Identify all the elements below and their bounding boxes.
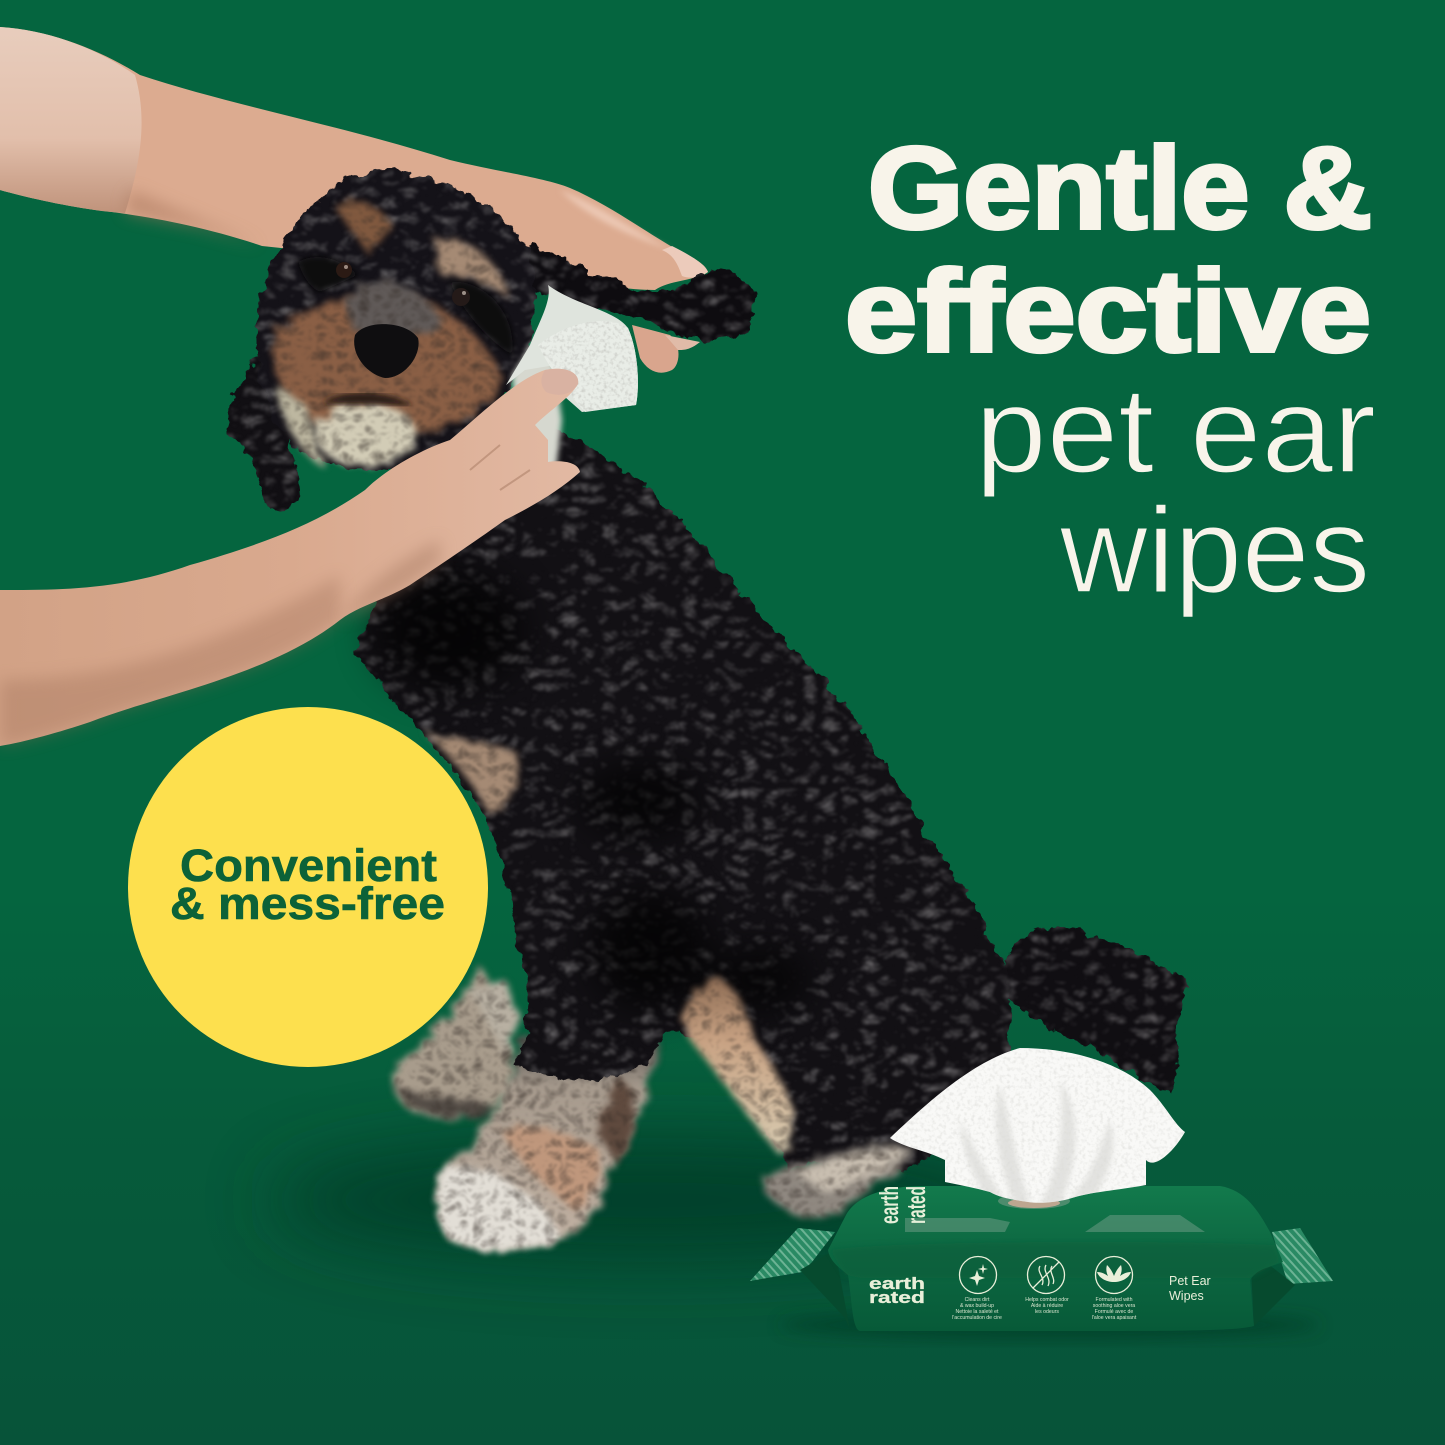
package benefit icons <box>960 1256 1132 1294</box>
wipe at ear <box>506 285 645 415</box>
headline: wipes <box>1059 482 1370 618</box>
dog hind paw <box>763 1144 911 1218</box>
headline: pet ear <box>975 362 1376 498</box>
package benefit captions: les odeurs <box>1035 1309 1059 1315</box>
package benefit captions: soothing aloe vera <box>1093 1303 1135 1309</box>
package right tab <box>1272 1228 1333 1284</box>
dog hind thigh tan patch <box>684 978 795 1156</box>
dog eyes <box>336 262 470 306</box>
pale fur beside hand <box>512 320 562 470</box>
package product name: Pet Ear <box>1169 1274 1211 1288</box>
dog right ear <box>528 245 756 340</box>
upper arm and hand <box>0 27 708 290</box>
package benefit captions: & wax build-up <box>960 1303 994 1309</box>
package body <box>828 1186 1283 1331</box>
package benefit captions: Cleans dirt <box>965 1297 990 1303</box>
package product name: Wipes <box>1169 1289 1204 1303</box>
lower arm and hand <box>0 369 580 746</box>
callout text: Convenient <box>180 840 437 891</box>
dog chin <box>315 402 415 466</box>
dog <box>227 169 1190 1250</box>
package benefit captions: Nettoie la saleté et <box>956 1309 999 1315</box>
wipes package: rated <box>901 1186 931 1224</box>
dog tail <box>1004 926 1190 1095</box>
dog mouth <box>325 394 410 405</box>
dog forehead markings <box>335 200 510 345</box>
package side folds <box>800 1250 850 1330</box>
package benefit captions: Helps combat odor <box>1025 1297 1069 1303</box>
headline: Gentle & <box>868 123 1372 253</box>
dog left ear <box>227 340 300 510</box>
package benefit captions: l'aloe vera apaisant <box>1092 1315 1137 1321</box>
package benefit captions: Aide à réduire <box>1031 1303 1063 1309</box>
package logo <box>869 1274 925 1307</box>
package benefit captions: Formulated with <box>1096 1297 1133 1303</box>
pulled out wipe <box>885 1045 1190 1205</box>
dog front leg and paw <box>437 1032 660 1250</box>
callout text: & mess-free <box>170 878 445 929</box>
dog muzzle <box>272 294 502 432</box>
dog eye patches <box>298 257 513 355</box>
package logo: earth <box>869 1274 925 1293</box>
package logo: rated <box>869 1288 925 1307</box>
dog head <box>256 169 537 470</box>
pale forearm section <box>0 27 142 213</box>
package benefit captions <box>952 1297 1137 1321</box>
yellow callout circle <box>128 707 488 1067</box>
package top fold shading <box>830 1242 1280 1278</box>
fingers behind the ear <box>632 325 700 373</box>
dog body <box>355 420 1012 1170</box>
package left tab <box>750 1228 835 1281</box>
package benefit captions: Formulé avec de <box>1095 1309 1133 1315</box>
callout text <box>170 840 445 929</box>
wipes package <box>750 1045 1333 1331</box>
dog far front paw <box>394 965 520 1119</box>
dog body dark shading <box>375 570 810 1010</box>
package top logo: earth <box>874 1186 904 1224</box>
package benefit captions: l'accumulation de cire <box>952 1315 1002 1321</box>
package top highlight <box>905 1215 1205 1232</box>
dog chest tan patch <box>425 732 520 815</box>
package hole <box>998 1193 1070 1209</box>
headline: effective <box>845 246 1371 376</box>
dog nose <box>354 324 419 378</box>
headline <box>845 123 1376 618</box>
package product name <box>1169 1274 1211 1303</box>
floor shadow <box>270 1138 1320 1339</box>
